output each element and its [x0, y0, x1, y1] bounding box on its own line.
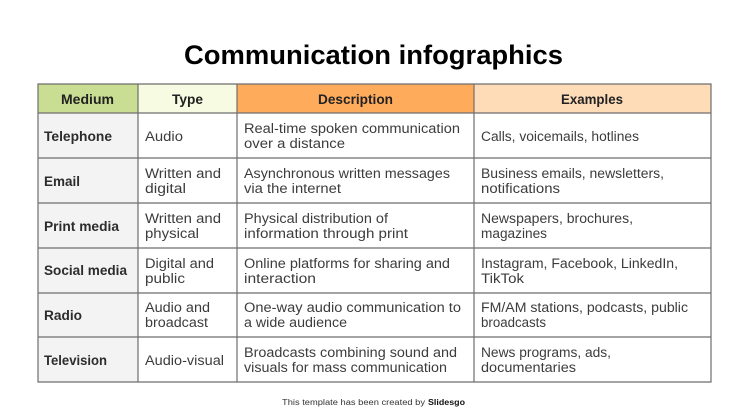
row: Radio: One-way audio communication to [244, 300, 461, 315]
row: Television: News programs, ads, [481, 345, 611, 360]
row: Email [44, 166, 664, 196]
footer credit: This template has been created by [282, 398, 425, 407]
row: Social media: Instagram, Facebook, LinkedIn, [481, 256, 678, 271]
row: Email: Written and [145, 166, 221, 181]
first column shading [38, 113, 138, 382]
row: Radio: Radio [44, 308, 82, 323]
row: Television: documentaries [481, 360, 576, 375]
row: Email: Email [44, 174, 80, 189]
header row [38, 84, 711, 113]
row: Radio: broadcast [145, 315, 208, 330]
footer credit: Slidesgo [428, 398, 465, 407]
row: Television: Broadcasts combining sound and [244, 345, 457, 360]
row: Print media: magazines [481, 226, 547, 241]
row: Television: visuals for mass communication [244, 360, 447, 375]
row: Radio: a wide audience [244, 315, 347, 330]
row: Social media: Digital and [145, 256, 214, 271]
header row: Type [172, 92, 203, 107]
row: Television: Television [44, 353, 107, 368]
row: Print media: information through print [244, 226, 408, 241]
row: Email: digital [145, 181, 186, 196]
row: Social media: interaction [244, 271, 316, 286]
row: Social media: Social media [44, 263, 127, 278]
table [38, 84, 711, 382]
row: Telephone [44, 121, 639, 151]
header row: Examples [561, 92, 623, 107]
header row: Description [318, 92, 393, 107]
header row: Medium [61, 92, 114, 107]
row: Television [44, 345, 611, 375]
row: Telephone: over a distance [244, 136, 345, 151]
footer credit [282, 398, 465, 407]
row: Email: Business emails, newsletters, [481, 166, 664, 181]
row: Telephone: Calls, voicemails, hotlines [481, 129, 639, 144]
row: Print media: Physical distribution of [244, 211, 388, 226]
row: Print media: Newspapers, brochures, [481, 211, 633, 226]
row: Social media: public [145, 271, 185, 286]
row: Email: Asynchronous written messages [244, 166, 450, 181]
row: Radio: broadcasts [481, 315, 546, 330]
row: Social media [44, 256, 678, 286]
row: Print media: Print media [44, 219, 119, 234]
row: Social media: TikTok [481, 271, 524, 286]
row: Television: Audio-visual [145, 353, 224, 368]
title: Communication infographics [184, 40, 563, 70]
row: Radio [44, 300, 688, 330]
row: Print media: physical [145, 226, 199, 241]
row: Print media [44, 211, 633, 241]
row: Radio: FM/AM stations, podcasts, public [481, 300, 688, 315]
row: Email: via the internet [244, 181, 341, 196]
row: Telephone: Audio [145, 129, 183, 144]
row: Telephone: Telephone [44, 129, 112, 144]
row: Social media: Online platforms for sharing and [244, 256, 450, 271]
row: Telephone: Real-time spoken communication [244, 121, 460, 136]
row: Print media: Written and [145, 211, 221, 226]
row: Radio: Audio and [145, 300, 210, 315]
row: Email: notifications [481, 181, 560, 196]
